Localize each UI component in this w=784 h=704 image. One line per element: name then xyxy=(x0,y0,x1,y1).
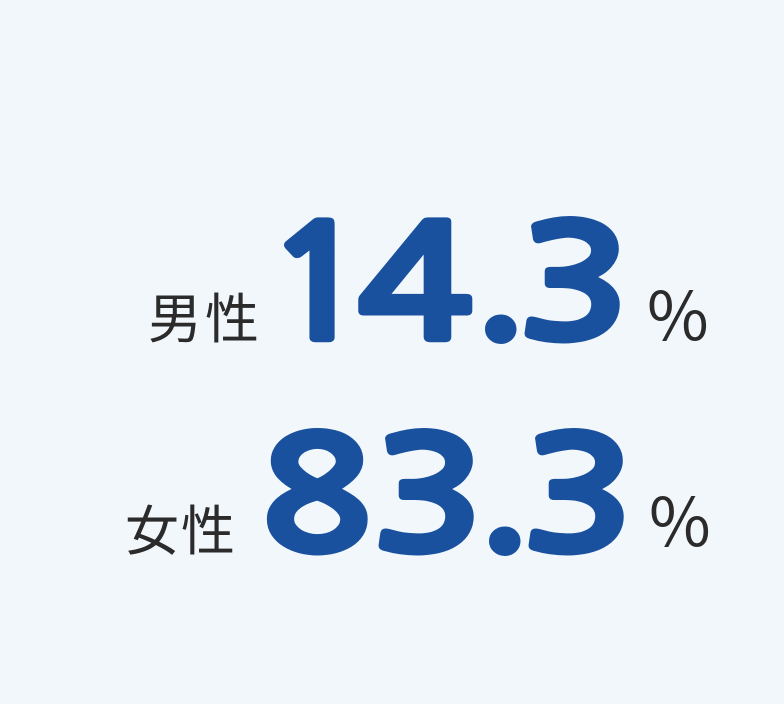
value: 83.3: . xyxy=(478,412,529,567)
unit: percent: % xyxy=(647,263,709,360)
row: male percentage xyxy=(148,200,709,363)
value: 14.3: 1 xyxy=(264,207,372,362)
label: male: 男 xyxy=(148,290,202,350)
value: 83.3 xyxy=(260,412,636,575)
label: female: 性 xyxy=(181,502,235,562)
value: 14.3 xyxy=(264,200,632,363)
value: 14.3: 4 xyxy=(356,208,474,363)
row: female percentage xyxy=(125,412,711,575)
value: 83.3: 3 xyxy=(371,419,486,574)
unit: percent: % xyxy=(649,469,711,566)
value: 83.3: 8 xyxy=(260,419,373,575)
label: male: 性 xyxy=(205,290,259,350)
label: female: 女 xyxy=(125,502,179,562)
value: 14.3: . xyxy=(474,200,525,355)
value: 14.3: 3 xyxy=(517,207,632,362)
value: 83.3: 3 xyxy=(521,419,636,574)
